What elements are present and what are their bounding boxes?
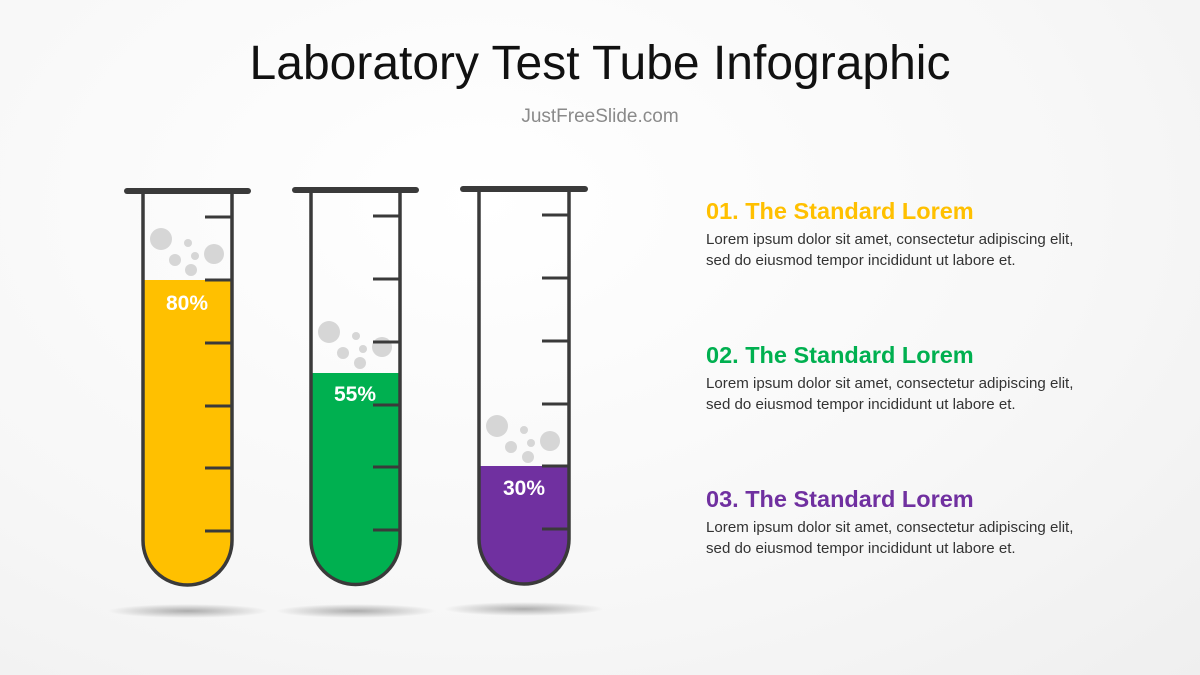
tube 3: 30% [444, 189, 604, 616]
tube 3: 30%: 30% [503, 477, 545, 500]
tube 1: 80% [108, 191, 268, 618]
item 1: Lorem ipsum dolor sit amet, consectetur adipiscing elit, [706, 231, 1073, 248]
item 1: sed do eiusmod tempor incididunt ut labore et. [706, 252, 1016, 269]
item 2: Lorem ipsum dolor sit amet, consectetur adipiscing elit, [706, 375, 1073, 392]
item 2 [706, 342, 1073, 413]
item 3 [706, 486, 1073, 557]
item 2: sed do eiusmod tempor incididunt ut labore et. [706, 396, 1016, 413]
subtitle: JustFreeSlide.com [521, 106, 679, 127]
item 3: sed do eiusmod tempor incididunt ut labore et. [706, 540, 1016, 557]
item 1 [706, 198, 1073, 269]
item 2: 02. The Standard Lorem [706, 342, 974, 368]
tube 2: 55%: 55% [334, 383, 376, 406]
item 3: Lorem ipsum dolor sit amet, consectetur adipiscing elit, [706, 519, 1073, 536]
item 3: 03. The Standard Lorem [706, 486, 974, 512]
item 1: 01. The Standard Lorem [706, 198, 974, 224]
title: Laboratory Test Tube Infographic [250, 37, 950, 90]
tube 1: 80%: 80% [166, 292, 208, 315]
tube 2: 55% [276, 190, 436, 618]
